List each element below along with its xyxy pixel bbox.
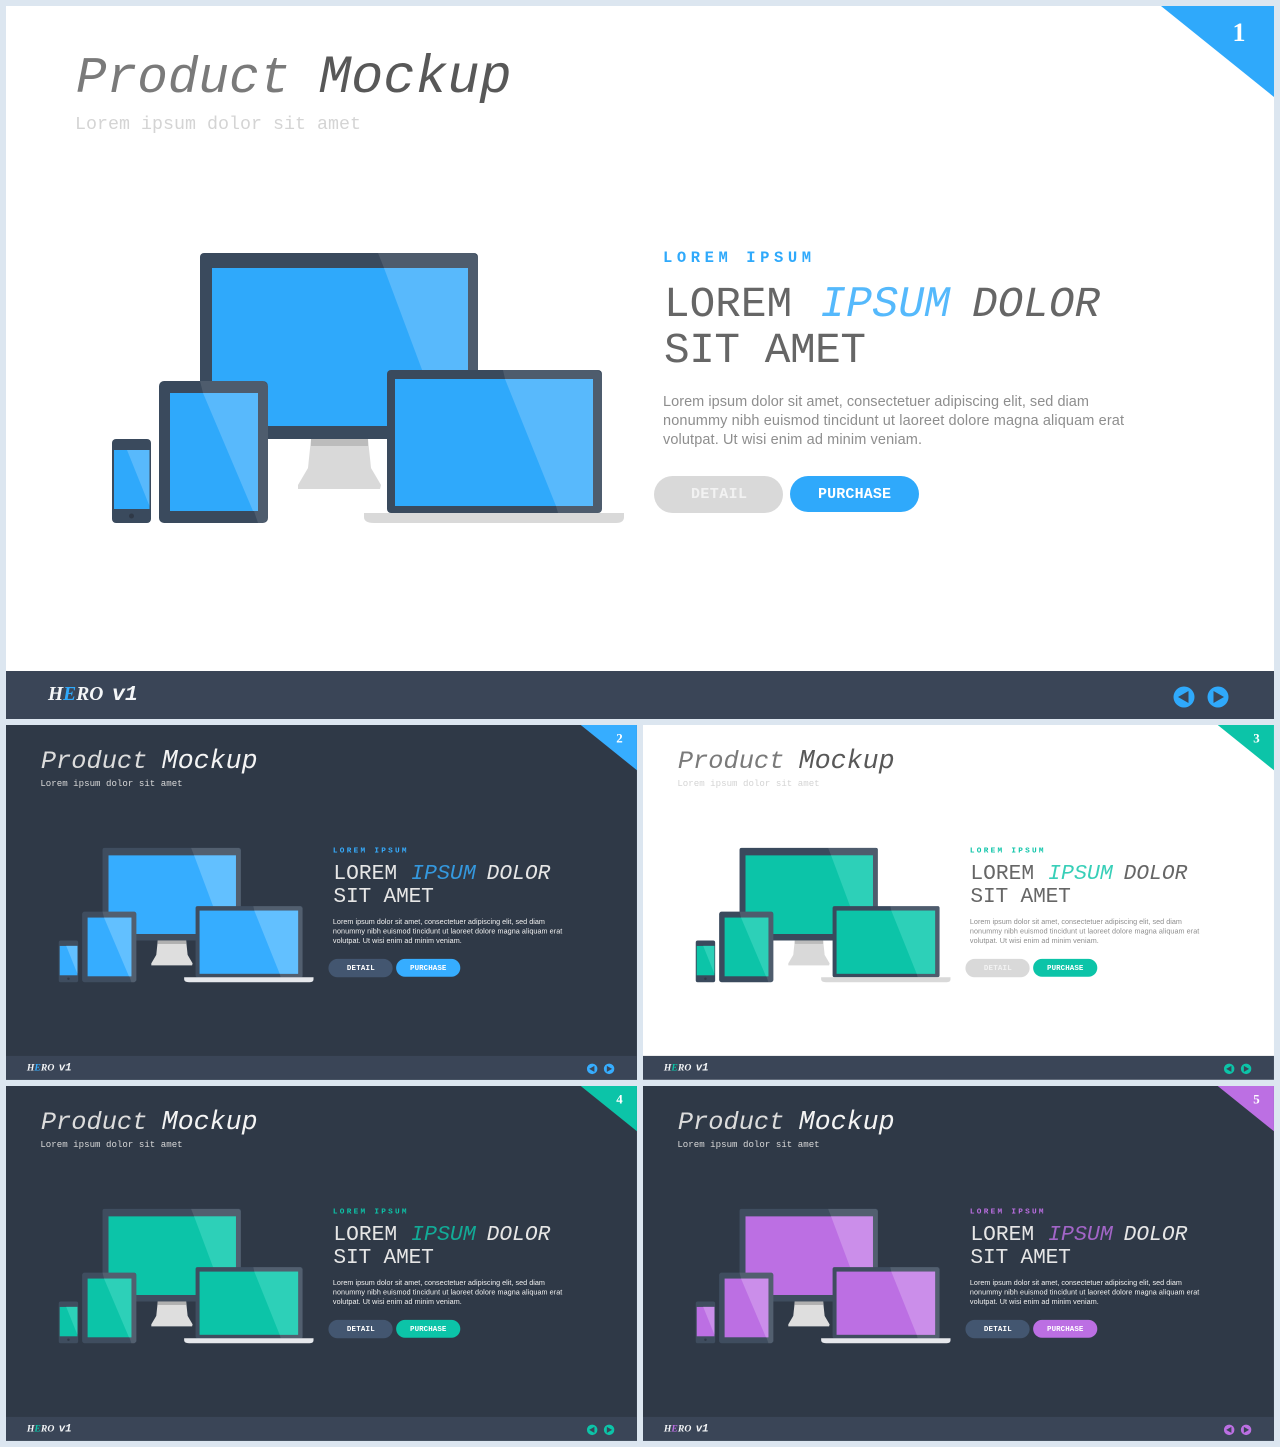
heading: SIT AMET: [333, 885, 434, 909]
icon: responsive devices: [59, 1209, 314, 1343]
button: detail: [965, 1320, 1030, 1338]
body text: nonummy nibh euismod tincidunt ut laoreet dolore magna aliquam erat: [663, 413, 1124, 429]
footer logo: HERO: [664, 1423, 691, 1434]
label: LOREM IPSUM: [333, 1208, 407, 1216]
body text: nonummy nibh euismod tincidunt ut laoreet dolore magna aliquam erat: [333, 1287, 562, 1296]
body text: nonummy nibh euismod tincidunt ut laoreet dolore magna aliquam erat: [970, 1287, 1199, 1296]
corner badge 2: 2: [616, 730, 623, 745]
button: purchase: [1033, 1320, 1097, 1338]
button: purchase: PURCHASE: [1047, 1326, 1084, 1334]
corner badge 4: [581, 1086, 637, 1131]
heading: SIT AMET: [970, 885, 1071, 909]
footer bar: [643, 1417, 1274, 1441]
footer logo: v1: [696, 1423, 709, 1435]
body text: [970, 1278, 1199, 1306]
panel: slide 2 dark blue: [6, 725, 637, 1080]
corner badge 1: [1161, 6, 1274, 97]
body text: Lorem ipsum dolor sit amet, consectetuer adipiscing elit, sed diam: [663, 394, 1089, 410]
footer bar: [6, 671, 1274, 719]
button: purchase: PURCHASE: [410, 965, 447, 973]
button: detail: DETAIL: [347, 1326, 375, 1334]
label: LOREM IPSUM: [333, 847, 407, 855]
corner badge 3: [1218, 725, 1274, 770]
footer logo: HERO: [48, 684, 103, 705]
label: LOREM IPSUM: [970, 1208, 1044, 1216]
heading: [333, 1223, 551, 1270]
footer logo: v1: [59, 1423, 72, 1435]
title: Product: [678, 747, 784, 776]
body text: Lorem ipsum dolor sit amet, consectetuer adipiscing elit, sed diam: [970, 1278, 1182, 1287]
body text: Lorem ipsum dolor sit amet, consectetuer adipiscing elit, sed diam: [970, 917, 1182, 926]
button: detail: DETAIL: [347, 965, 375, 973]
panel: slide 4 dark teal: [6, 1086, 637, 1441]
button: purchase: PURCHASE: [1047, 965, 1084, 973]
body text: Lorem ipsum dolor sit amet, consectetuer adipiscing elit, sed diam: [333, 917, 545, 926]
subtitle: Lorem ipsum dolor sit amet: [75, 115, 361, 135]
title: Product: [41, 747, 147, 776]
body text: [663, 394, 1124, 448]
body text: Lorem ipsum dolor sit amet, consectetuer adipiscing elit, sed diam: [333, 1278, 545, 1287]
panel: slide 5 dark purple: [643, 1086, 1274, 1441]
button: purchase: [396, 959, 460, 977]
panel: slide 3 light teal: [643, 725, 1274, 1080]
subtitle: Lorem ipsum dolor sit amet: [677, 778, 820, 789]
title: Mockup: [799, 1107, 895, 1137]
heading: [664, 280, 1100, 375]
heading: SIT AMET: [970, 1246, 1071, 1270]
footer bar: [6, 1417, 637, 1441]
icon: responsive devices: [112, 253, 624, 523]
button: detail: DETAIL: [984, 1326, 1012, 1334]
body text: volutpat. Ut wisi enim ad minim veniam.: [970, 1297, 1099, 1306]
body text: volutpat. Ut wisi enim ad minim veniam.: [663, 432, 922, 448]
subtitle: Lorem ipsum dolor sit amet: [40, 1139, 183, 1150]
footer bar: [6, 1056, 637, 1080]
nav arrows: [1174, 686, 1228, 708]
heading: SIT AMET: [664, 326, 866, 375]
nav arrows: [587, 1064, 614, 1074]
corner badge 5: 5: [1253, 1091, 1260, 1106]
footer logo: HERO: [664, 1062, 691, 1073]
footer bar: [643, 1056, 1274, 1080]
corner badge 1: 1: [1232, 18, 1246, 47]
body text: [333, 1278, 562, 1306]
heading: IPSUM: [820, 281, 951, 330]
title: Mockup: [162, 1107, 258, 1137]
heading: SIT AMET: [333, 1246, 434, 1270]
heading: [970, 1223, 1188, 1270]
body text: nonummy nibh euismod tincidunt ut laoreet dolore magna aliquam erat: [333, 926, 562, 935]
corner badge 2: [581, 725, 637, 770]
heading: LOREM: [970, 1223, 1034, 1247]
icon: responsive devices: [696, 1209, 951, 1343]
button: purchase: PURCHASE: [410, 1326, 447, 1334]
body text: volutpat. Ut wisi enim ad minim veniam.: [970, 936, 1099, 945]
footer logo: v1: [59, 1062, 72, 1074]
button: purchase: [1033, 959, 1097, 977]
button: purchase: [790, 476, 919, 512]
footer logo: HERO: [27, 1423, 54, 1434]
heading: DOLOR: [487, 862, 551, 886]
heading: LOREM: [664, 280, 792, 329]
title: Mockup: [319, 48, 512, 109]
button: purchase: [396, 1320, 460, 1338]
title: Product: [41, 1108, 147, 1137]
corner badge 4: 4: [616, 1091, 623, 1106]
corner badge 5: [1218, 1086, 1274, 1131]
heading: LOREM: [333, 1223, 397, 1247]
button: detail: [965, 959, 1030, 977]
nav arrows: [1224, 1425, 1251, 1435]
label: LOREM IPSUM: [663, 249, 811, 267]
body text: [333, 917, 562, 945]
panel: slide 1 hero light blue: [6, 6, 1274, 719]
heading: IPSUM: [1048, 862, 1114, 886]
nav arrows: [587, 1425, 614, 1435]
body text: volutpat. Ut wisi enim ad minim veniam.: [333, 1297, 462, 1306]
button: detail: [328, 1320, 393, 1338]
footer logo: HERO: [27, 1062, 54, 1073]
body text: [970, 917, 1199, 945]
corner badge 3: 3: [1253, 730, 1260, 745]
title: Product: [76, 51, 290, 108]
heading: DOLOR: [1124, 1223, 1188, 1247]
button: purchase: PURCHASE: [818, 486, 891, 503]
heading: IPSUM: [411, 862, 477, 886]
subtitle: Lorem ipsum dolor sit amet: [40, 778, 183, 789]
footer logo: v1: [696, 1062, 709, 1074]
heading: [970, 862, 1188, 909]
heading: IPSUM: [411, 1223, 477, 1247]
heading: DOLOR: [1124, 862, 1188, 886]
body text: nonummy nibh euismod tincidunt ut laoreet dolore magna aliquam erat: [970, 926, 1199, 935]
title: Mockup: [162, 746, 258, 776]
heading: LOREM: [970, 862, 1034, 886]
icon: responsive devices: [59, 848, 314, 982]
button: detail: DETAIL: [984, 965, 1012, 973]
button: detail: [328, 959, 393, 977]
heading: IPSUM: [1048, 1223, 1114, 1247]
heading: DOLOR: [487, 1223, 551, 1247]
body text: volutpat. Ut wisi enim ad minim veniam.: [333, 936, 462, 945]
title: Mockup: [799, 746, 895, 776]
button: detail: [654, 476, 783, 513]
footer logo: v1: [112, 683, 138, 707]
heading: [333, 862, 551, 909]
icon: responsive devices: [696, 848, 951, 982]
label: LOREM IPSUM: [970, 847, 1044, 855]
nav arrows: [1224, 1064, 1251, 1074]
button: detail: DETAIL: [691, 486, 747, 503]
heading: LOREM: [333, 862, 397, 886]
heading: DOLOR: [972, 280, 1100, 329]
title: Product: [678, 1108, 784, 1137]
subtitle: Lorem ipsum dolor sit amet: [677, 1139, 820, 1150]
